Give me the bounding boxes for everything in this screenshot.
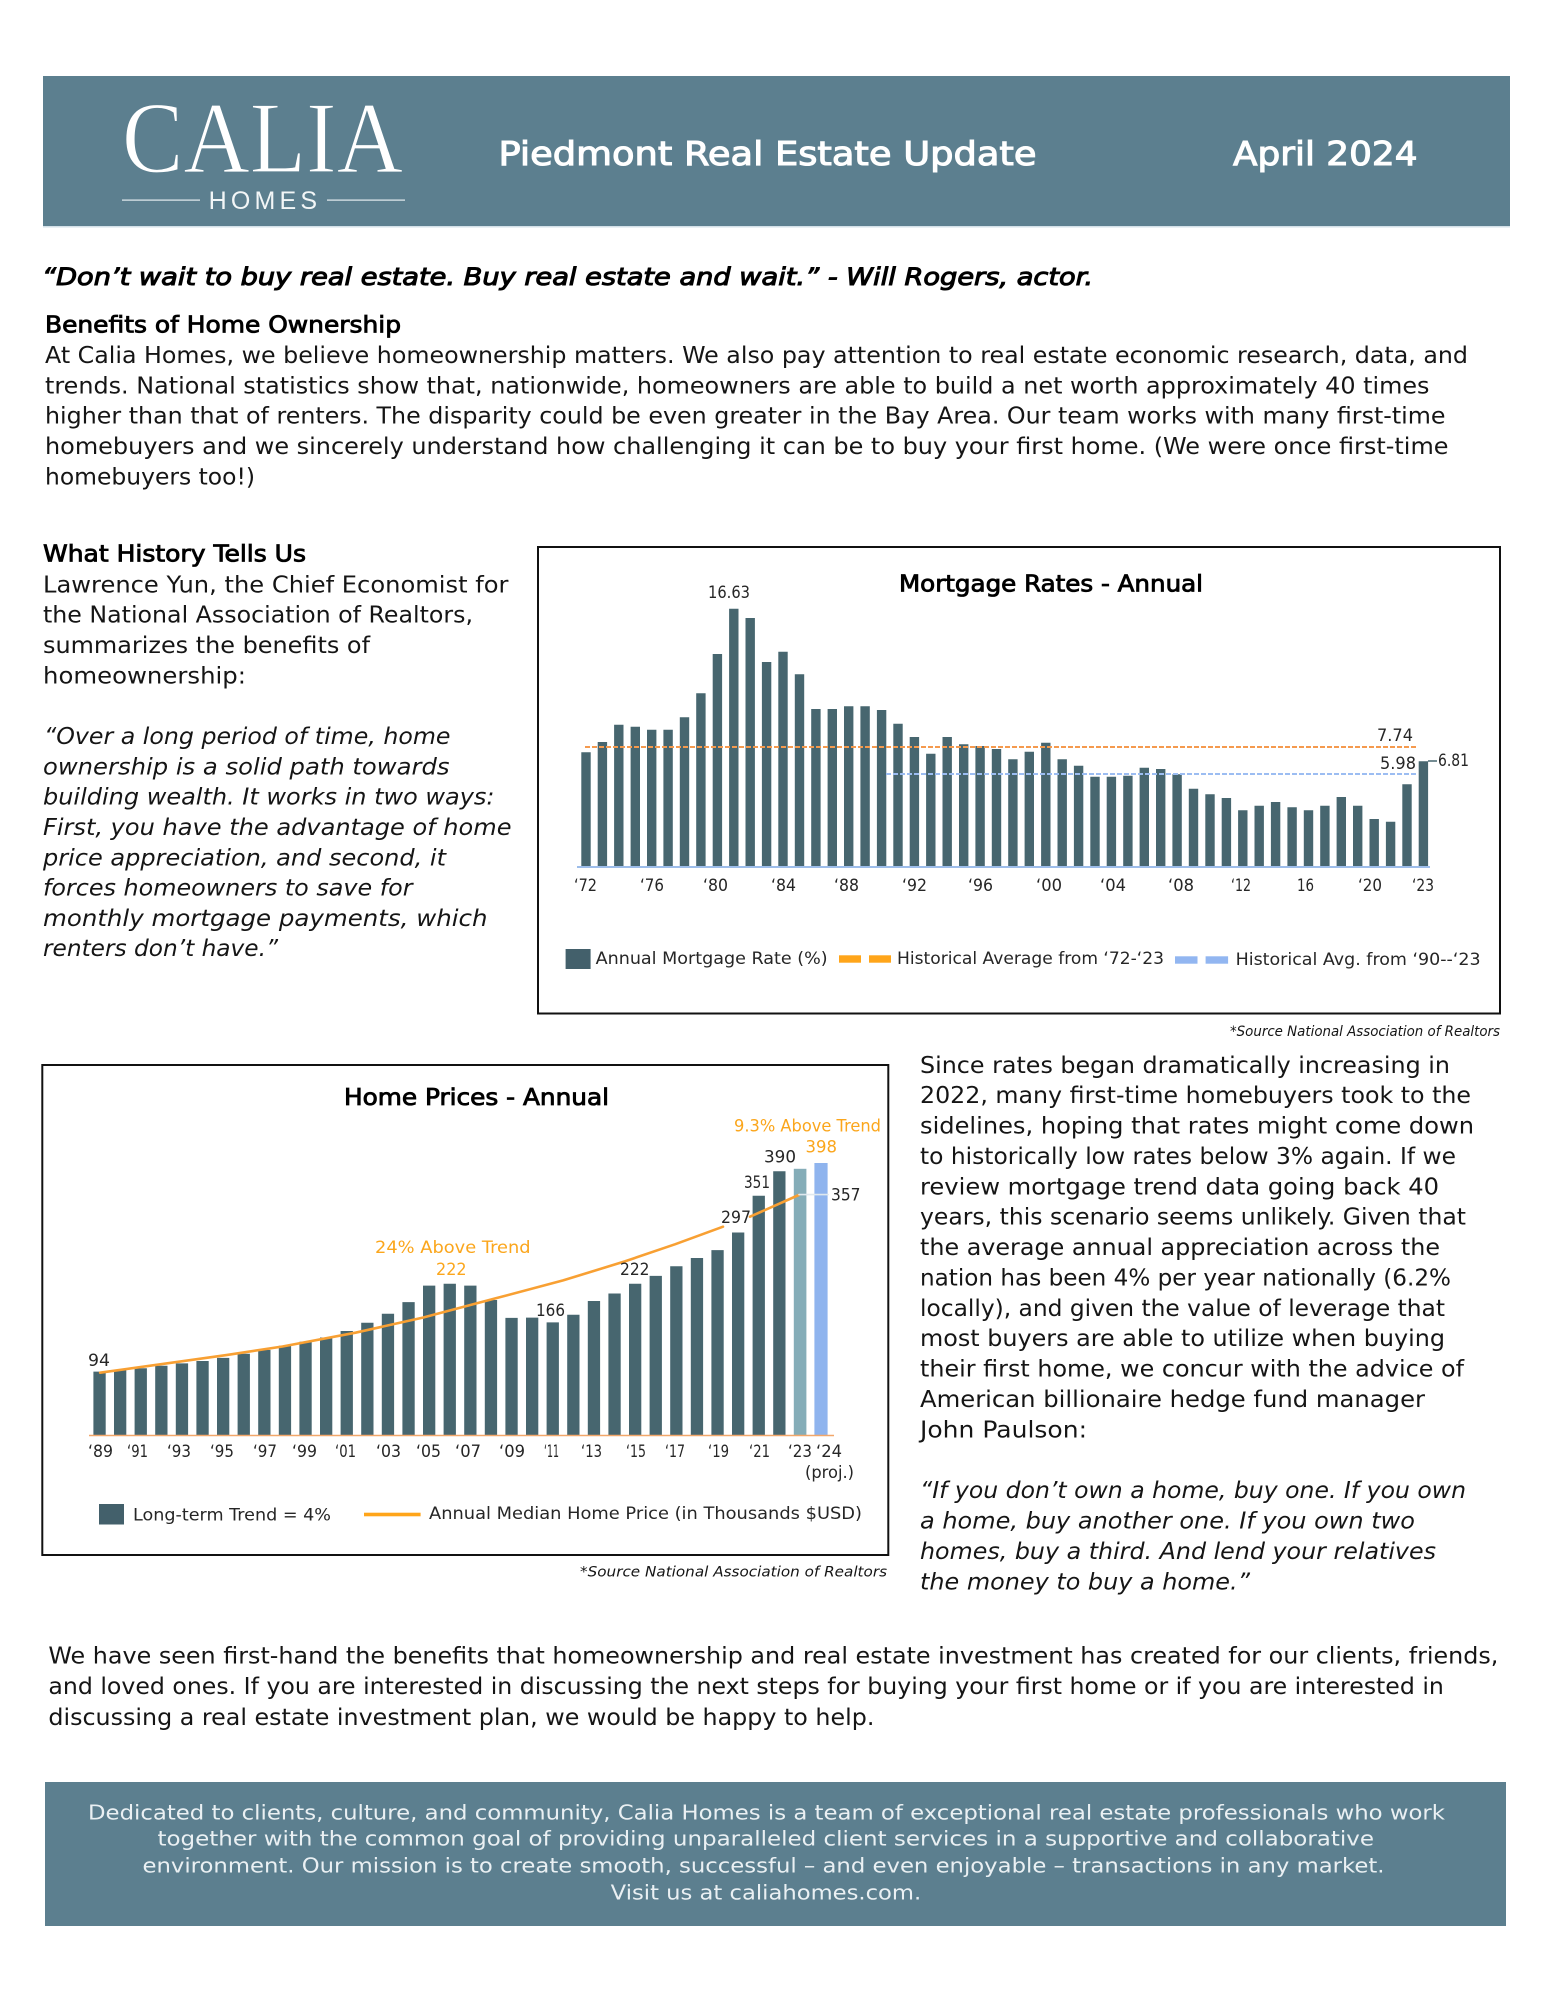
logo: Calia Homes: CALIA xyxy=(122,82,403,195)
text block: rates commentary: sidelines, hoping that rates might come down xyxy=(920,1114,1474,1140)
x axis labels: mortgage years: ‘23 xyxy=(1412,876,1434,896)
text block: what history tells us xyxy=(42,541,511,962)
text block: benefits of home ownership: homebuyers and we sincerely understand how challenging it can be to buy your first home. (We were once first-time xyxy=(45,434,1448,460)
x axis labels: home price years: ‘01 xyxy=(335,1442,356,1462)
quote: Lawrence Yun: First, you have the advantage of home xyxy=(43,815,511,841)
x axis labels: home price years: ‘13 xyxy=(581,1442,602,1462)
x axis labels: mortgage years: ‘00 xyxy=(1036,876,1062,896)
quote: John Paulson xyxy=(920,1478,1466,1595)
x axis labels: home price years: ‘97 xyxy=(253,1442,277,1462)
text block: rates commentary: years, this scenario seems unlikely. Given that xyxy=(920,1205,1466,1231)
x axis labels: home price years: ‘24 xyxy=(816,1442,842,1462)
x axis labels: home price years: ‘03 xyxy=(376,1442,401,1462)
x axis labels: home price years xyxy=(88,1442,854,1483)
x axis labels: mortgage years: ‘92 xyxy=(902,876,927,896)
text block: what history tells us: Lawrence Yun, the Chief Economist for xyxy=(43,572,509,598)
data labels: mortgage rates: 6.81 xyxy=(1438,751,1469,771)
data labels: home prices: 351 xyxy=(744,1173,770,1193)
x axis labels: home price years: ‘09 xyxy=(499,1442,525,1462)
text block: rates commentary: their first home, we concur with the advice of xyxy=(920,1357,1465,1383)
x axis labels: home price years: ‘95 xyxy=(210,1442,234,1462)
x axis labels: home price years: (proj.) xyxy=(805,1463,854,1483)
text block: closing paragraph: We have seen first-hand the benefits that homeownership and real estate investment has created for our clients, friends, xyxy=(48,1643,1498,1669)
source note: home prices chart: *Source National Association of Realtors xyxy=(580,1564,887,1580)
quote: Lawrence Yun: ownership is a solid path towards xyxy=(43,754,450,780)
text block: benefits of home ownership: trends. National statistics show that, nationwide, homeowners are able to build a net worth approximately 40 times xyxy=(45,373,1430,399)
header banner xyxy=(43,76,1510,228)
bar: 2024 projected xyxy=(814,1163,828,1435)
quote: Lawrence Yun: “Over a long period of time, home xyxy=(44,724,450,750)
panel: home prices chart xyxy=(42,1065,888,1555)
heading: history: What History Tells Us xyxy=(43,541,306,568)
source note: mortgage chart: *Source National Association of Realtors xyxy=(1230,1024,1500,1040)
heading: benefits: Benefits of Home Ownership xyxy=(45,312,401,339)
banner title: Piedmont Real Estate Update xyxy=(498,135,1036,173)
text block: benefits of home ownership: At Calia Homes, we believe homeownership matters. We also pay attention to real estate economic research, data, and xyxy=(45,343,1468,369)
legend: home prices chart: Long-term Trend = 4% xyxy=(133,1505,331,1525)
data labels: home prices: 222 xyxy=(620,1260,650,1280)
data labels: home prices: 222 xyxy=(436,1260,467,1280)
text block: rates commentary: most buyers are able to utilize when buying xyxy=(920,1326,1445,1352)
footer banner xyxy=(45,1782,1506,1926)
text block: what history tells us: the National Association of Realtors, xyxy=(43,603,473,629)
legend: mortgage chart: Annual Mortgage Rate (%) xyxy=(596,949,828,969)
legend: mortgage chart: Historical Avg. from ‘90--‘23 xyxy=(1236,950,1481,970)
legend: mortgage chart xyxy=(566,949,1481,970)
x axis labels: mortgage years: ‘72 xyxy=(574,876,597,896)
quote: John Paulson: “If you don’t own a home, buy one. If you own xyxy=(920,1478,1466,1504)
line: historical average 72-23 xyxy=(585,746,1418,748)
text block: rates commentary: the average annual appreciation across the xyxy=(920,1235,1440,1261)
data labels: home prices xyxy=(88,1117,881,1371)
text block: benefits of home ownership: higher than that of renters. The disparity could be even greater in the Bay Area. Our team works with many first-time xyxy=(45,404,1446,430)
text block: what history tells us: summarizes the benefits of xyxy=(43,633,371,659)
data labels: home prices: 166 xyxy=(536,1301,565,1321)
quote: John Paulson: homes, buy a third. And lend your relatives xyxy=(920,1539,1436,1565)
text block: rates commentary: to historically low rates below 3% again. If we xyxy=(920,1144,1456,1170)
x axis labels: mortgage years: ‘04 xyxy=(1100,876,1126,896)
x axis labels: mortgage years: ‘08 xyxy=(1168,876,1194,896)
x axis labels: mortgage years: ‘20 xyxy=(1358,876,1382,896)
footer banner: Visit us at caliahomes.com. xyxy=(611,1880,921,1904)
x axis labels: mortgage years: ‘76 xyxy=(640,876,664,896)
data labels: home prices: 9.3% Above Trend xyxy=(734,1117,881,1137)
data labels: mortgage rates xyxy=(708,583,1469,774)
quote: Lawrence Yun: renters don’t have.” xyxy=(43,936,278,962)
panel: mortgage rates chart xyxy=(538,547,1500,1014)
trend line xyxy=(100,1195,828,1373)
text block: rates commentary: 2022, many first-time homebuyers took to the xyxy=(920,1083,1471,1109)
x axis labels: mortgage years: ‘80 xyxy=(703,876,728,896)
quote: John Paulson: the money to buy a home.” xyxy=(920,1569,1250,1595)
data labels: home prices: 390 xyxy=(764,1148,796,1168)
x axis labels: home price years: ‘07 xyxy=(455,1442,481,1462)
x axis labels: home price years: ‘23 xyxy=(788,1442,812,1462)
x axis labels: home price years: ‘17 xyxy=(665,1442,685,1462)
text block: benefits of home ownership: homebuyers too!) xyxy=(45,464,255,490)
quote: John Paulson: a home, buy another one. If you own two xyxy=(920,1508,1415,1534)
text block: closing paragraph xyxy=(48,1643,1498,1731)
data labels: home prices: 357 xyxy=(831,1186,860,1206)
x axis labels: home price years: ‘93 xyxy=(167,1442,191,1462)
data labels: mortgage rates: 7.74 xyxy=(1377,726,1413,746)
x axis labels: mortgage years: 16 xyxy=(1297,876,1314,896)
chart title: home prices: Home Prices - Annual xyxy=(344,1084,609,1111)
text block: rates commentary: American billionaire hedge fund manager xyxy=(920,1387,1426,1413)
data labels: mortgage rates: 16.63 xyxy=(708,583,750,603)
bar: 2023 xyxy=(794,1169,806,1435)
data labels: mortgage rates: 5.98 xyxy=(1380,754,1416,774)
x axis labels: mortgage years: ‘12 xyxy=(1231,876,1251,896)
banner date: April 2024 xyxy=(1233,135,1418,173)
line: historical average 90-23 xyxy=(886,773,1418,775)
bar chart: annual mortgage rate xyxy=(581,609,1428,867)
quote: Lawrence Yun xyxy=(42,724,511,962)
x axis labels: home price years: ‘19 xyxy=(708,1442,729,1462)
x axis labels: home price years: ‘21 xyxy=(749,1442,770,1462)
x axis labels: mortgage years: ‘96 xyxy=(968,876,993,896)
footer banner: together with the common goal of providing unparalleled client services in a supportive and collaborative xyxy=(158,1827,1374,1851)
data labels: home prices: 398 xyxy=(806,1137,837,1157)
x axis labels: home price years: ‘05 xyxy=(416,1442,441,1462)
x axis labels: mortgage years: ‘88 xyxy=(834,876,859,896)
text block: rates commentary: Since rates began dramatically increasing in xyxy=(920,1053,1450,1079)
text block: closing paragraph: and loved ones. If you are interested in discussing the next steps for buying your first home or if you are interested in xyxy=(48,1674,1444,1700)
quote: Lawrence Yun: monthly mortgage payments, which xyxy=(43,906,488,932)
legend: home prices chart: Annual Median Home Price (in Thousands $USD) xyxy=(429,1504,862,1524)
x axis labels: home price years: ‘15 xyxy=(626,1442,646,1462)
data labels: home prices: 94 xyxy=(88,1351,110,1371)
quote: Lawrence Yun: forces homeowners to save for xyxy=(43,876,414,902)
text block: rates commentary: John Paulson: xyxy=(918,1417,1087,1443)
chart title: mortgage rates: Mortgage Rates - Annual xyxy=(899,571,1203,598)
legend: mortgage chart: Historical Average from ‘72-‘23 xyxy=(897,949,1164,969)
x axis labels: mortgage years xyxy=(574,876,1434,896)
text block: what history tells us: homeownership: xyxy=(43,663,246,689)
quote: Lawrence Yun: price appreciation, and second, it xyxy=(42,845,447,871)
text block: benefits of home ownership xyxy=(45,312,1468,490)
data labels: home prices: 24% Above Trend xyxy=(375,1238,531,1258)
legend: home prices chart xyxy=(99,1504,862,1525)
text block: rates commentary: review mortgage trend data going back 40 xyxy=(920,1174,1439,1200)
text block: rates commentary: nation has been 4% per year nationally (6.2% xyxy=(920,1266,1451,1292)
quote: Lawrence Yun: building wealth. It works in two ways: xyxy=(43,785,494,811)
data labels: home prices: 297 xyxy=(721,1208,751,1228)
text block: rates commentary xyxy=(918,1053,1474,1595)
x axis labels: home price years: ‘11 xyxy=(544,1442,559,1462)
text block: rates commentary: locally), and given the value of leverage that xyxy=(920,1296,1445,1322)
logo: Calia Homes: HOMES xyxy=(209,187,317,215)
text block: closing paragraph: discussing a real estate investment plan, we would be happy to help. xyxy=(48,1705,874,1731)
x axis labels: mortgage years: ‘84 xyxy=(771,876,796,896)
x axis labels: home price years: ‘89 xyxy=(88,1442,113,1462)
footer banner: Dedicated to clients, culture, and community, Calia Homes is a team of exceptional real estate professionals who work xyxy=(88,1800,1445,1824)
bar chart: annual median home price xyxy=(93,1171,785,1435)
footer banner: environment. Our mission is to create smooth, successful – and even enjoyable – transactions in any market. xyxy=(142,1854,1384,1878)
opening quote: “Don’t wait to buy real estate. Buy real estate and wait.” - Will Rogers, actor. xyxy=(42,263,1093,291)
x axis labels: home price years: ‘99 xyxy=(292,1442,317,1462)
x axis labels: home price years: ‘91 xyxy=(127,1442,148,1462)
